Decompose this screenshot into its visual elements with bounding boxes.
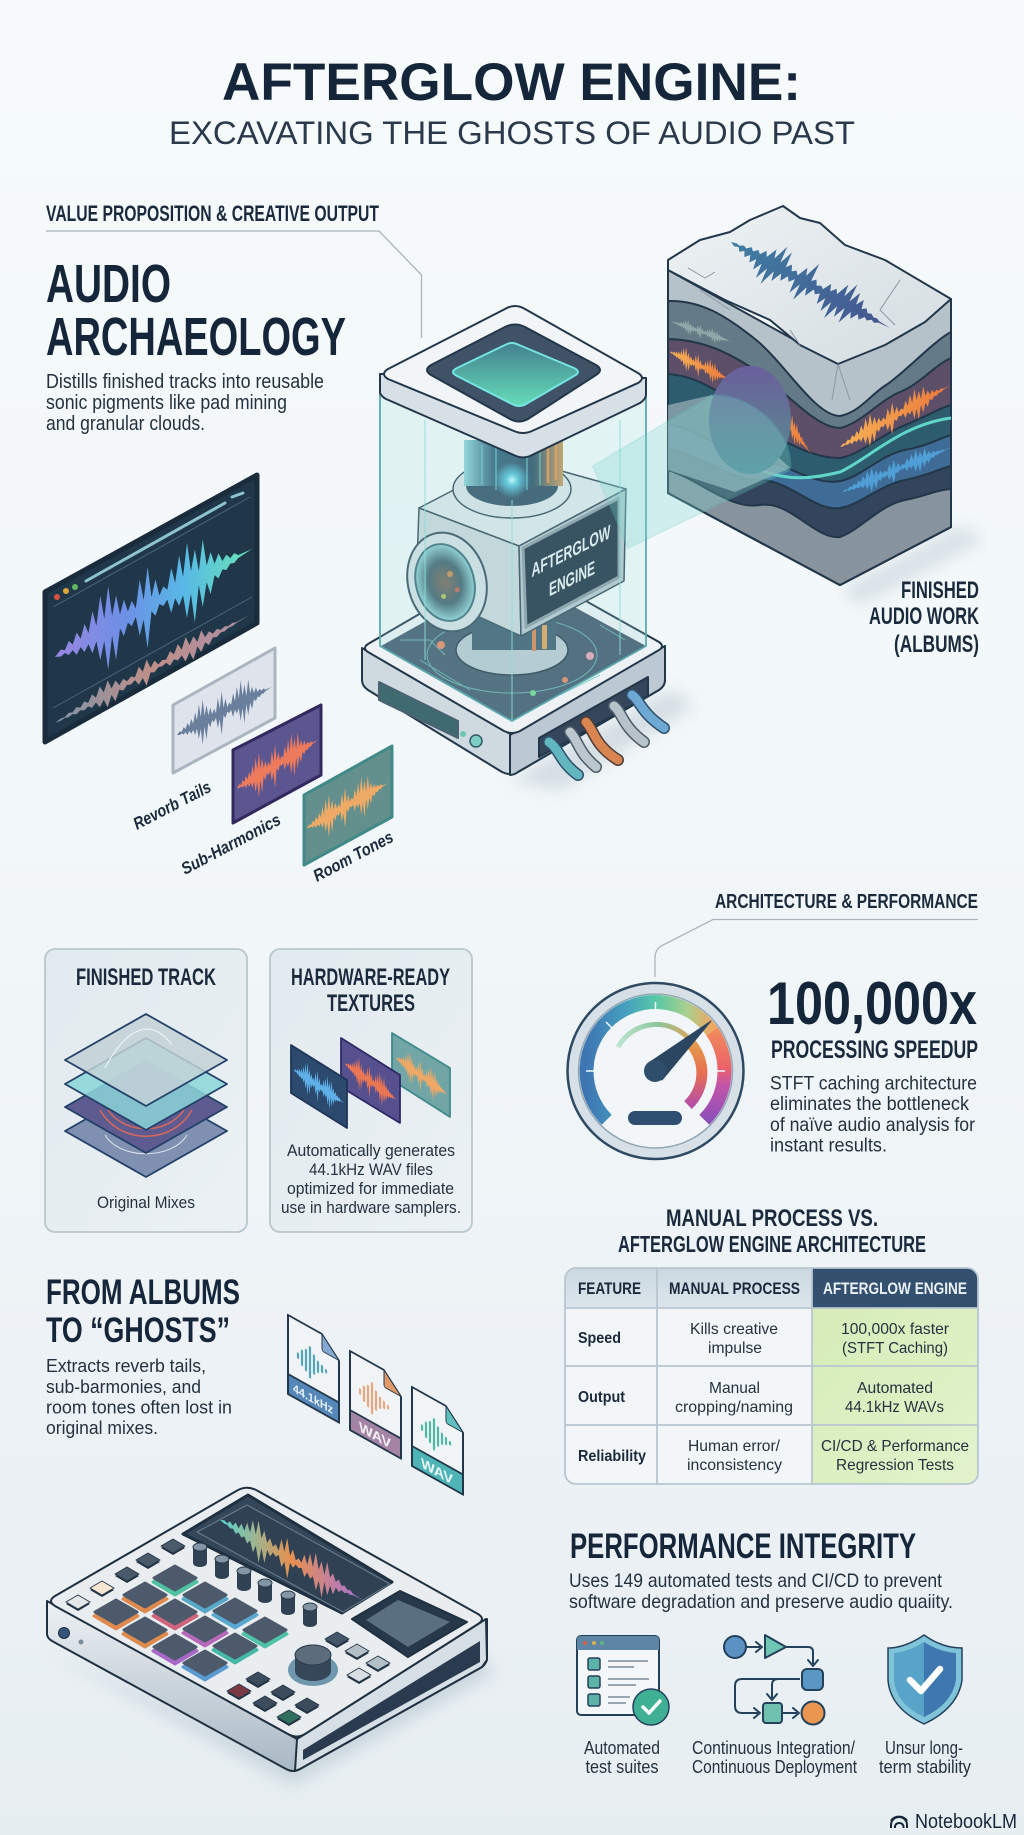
comparison table heading (618, 1205, 926, 1257)
description (569, 1570, 953, 1613)
panel caption: Original Mixes (97, 1193, 195, 1212)
stone cracks (688, 268, 900, 400)
label: sub-harmonics: Sub-Harmonics (178, 810, 284, 879)
circuit floor (381, 573, 646, 721)
label plate: AFTERGLOW (532, 522, 611, 582)
window buttons (54, 584, 78, 600)
icon: ci/cd pipeline flow (724, 1635, 824, 1724)
strata layers (668, 270, 951, 585)
rock top surface (668, 206, 951, 364)
waveforms in strata (670, 314, 952, 504)
status lights (460, 731, 482, 747)
table header row: FEATURE (578, 1280, 641, 1298)
label plate (523, 498, 619, 627)
etched waveform (718, 223, 904, 347)
panel description: Automatically generates (287, 1141, 455, 1160)
device body (47, 1488, 487, 1771)
title: AFTERGLOW ENGINE: (222, 53, 801, 112)
icon: wav file teal (412, 1387, 463, 1495)
panel description: 44.1kHz WAV files (309, 1160, 433, 1179)
subtitle: EXCAVATING THE GHOSTS OF AUDIO PAST (169, 115, 855, 151)
small knobs (193, 1543, 317, 1627)
main knob (288, 1645, 338, 1686)
section: from albums to ghosts (46, 1273, 240, 1438)
glass enclosure (380, 393, 646, 721)
window frame (45, 475, 257, 742)
section: value proposition (46, 201, 422, 435)
icon: automated test window (577, 1636, 669, 1725)
comparison table (565, 1268, 978, 1484)
texture card: reverb tails (173, 648, 275, 773)
icon: 44.1kHz file (288, 1315, 339, 1423)
description (46, 371, 324, 435)
icon caption: automated test suites: test suites (586, 1757, 658, 1777)
table row: reliability: inconsistency (687, 1457, 782, 1474)
layered mix stack (65, 1014, 227, 1177)
rock shadow (840, 525, 985, 605)
heading: audio archaeology: ARCHAEOLOGY (46, 307, 346, 367)
icon caption: long-term stability: term stability (879, 1757, 971, 1777)
panel heading: TEXTURES (327, 990, 415, 1017)
table header row: AFTERGLOW ENGINE (823, 1280, 967, 1298)
stat description (770, 1074, 977, 1156)
leader line (655, 920, 978, 977)
table row: reliability: Regression Tests (836, 1457, 954, 1474)
icon caption: automated test suites (584, 1738, 660, 1777)
upper column (464, 440, 563, 490)
cables (549, 695, 664, 775)
front jacks (58, 1628, 84, 1644)
description: software degradation and preserve audio quaiity. (569, 1591, 953, 1613)
heading: TO “GHOSTS” (46, 1311, 230, 1350)
screen waveform (220, 1499, 363, 1621)
window guides (53, 497, 252, 708)
heading (46, 1273, 240, 1350)
icon: wav file teal: WAV (421, 1455, 453, 1489)
section label: VALUE PROPOSITION & CREATIVE OUTPUT (46, 201, 379, 226)
title bar (86, 493, 243, 581)
icon: 44.1kHz file: 44.1kHz (293, 1381, 333, 1417)
heading: audio archaeology (46, 254, 346, 367)
indicator slot (379, 682, 458, 738)
label: finished audio work: (ALBUMS) (894, 631, 979, 658)
panel description: optimized for immediate (287, 1179, 454, 1198)
label: finished audio work: FINISHED (901, 577, 979, 604)
description: original mixes. (46, 1418, 158, 1438)
texture card: sub-harmonics (233, 705, 321, 823)
illustration: afterglow engine machine (362, 306, 790, 790)
table row: speed: Kills creative (690, 1321, 778, 1338)
table fills (565, 1268, 978, 1484)
lens (396, 524, 498, 640)
label: room tones: Room Tones (310, 827, 397, 886)
icon caption: automated test suites: Automated (584, 1738, 660, 1758)
panel: finished track (45, 949, 247, 1232)
drum pads (94, 1566, 287, 1680)
description: sub-barmonies, and (46, 1377, 201, 1397)
icon: stability shield (888, 1635, 962, 1724)
panel description: use in hardware samplers. (281, 1198, 461, 1217)
icon: speed gauge (568, 983, 744, 1159)
central block (416, 458, 626, 636)
table row: output: Manual (709, 1380, 760, 1397)
table header row (578, 1280, 967, 1298)
table header row: MANUAL PROCESS (669, 1280, 800, 1298)
table row: reliability: Human error/ (688, 1438, 781, 1455)
illustration: hardware sampler (47, 1488, 495, 1785)
port slot (539, 677, 648, 757)
panel heading: FINISHED TRACK (76, 964, 216, 991)
panel description (281, 1141, 461, 1217)
stat description: eliminates the bottleneck (770, 1094, 969, 1115)
section: architecture and performance (568, 891, 978, 1159)
description: sonic pigments like pad mining (46, 392, 287, 414)
icon caption: ci/cd: Continuous Deployment (692, 1757, 857, 1777)
table row: speed: (STFT Caching) (842, 1340, 948, 1357)
table row: output: Automated (857, 1380, 933, 1397)
function buttons (66, 1539, 390, 1726)
label: reverb tails: Revorb Tails (130, 777, 214, 834)
ring collar (453, 460, 571, 518)
section: performance integrity (569, 1527, 971, 1777)
device shadow (47, 1650, 495, 1785)
stat: 100,000x: 100,000x (767, 970, 977, 1037)
panel heading (291, 964, 450, 1017)
table row: speed: 100,000x faster (841, 1321, 950, 1338)
label: finished audio work (869, 577, 979, 658)
leader line (46, 231, 422, 338)
texture card: room tones (304, 746, 392, 865)
texture tiles (291, 1033, 450, 1128)
top cap (380, 306, 646, 458)
icon caption: ci/cd: Continuous Integration/ (692, 1738, 855, 1758)
description (46, 1356, 232, 1438)
table grid (565, 1268, 978, 1484)
main screen (183, 1495, 392, 1613)
table row: output: 44.1kHz WAVs (845, 1399, 944, 1416)
icon caption: long-term stability (879, 1738, 971, 1777)
illustration: rock strata of finished audio (668, 206, 985, 605)
base plinth (362, 562, 665, 775)
stat description: of naïve audio analysis for (770, 1115, 976, 1136)
stat description: instant results. (770, 1136, 887, 1156)
description: room tones often lost in (46, 1398, 232, 1418)
table row: output (578, 1380, 944, 1416)
icon: wav file orange (350, 1351, 401, 1459)
illustration: waveform window (45, 475, 257, 742)
heading: audio archaeology: AUDIO (46, 254, 171, 314)
secondary screen (352, 1591, 467, 1657)
tinted stone under beam (668, 395, 790, 492)
panel heading: HARDWARE-READY (291, 964, 450, 991)
secondary waveform (55, 602, 250, 736)
description: Uses 149 automated tests and CI/CD to prevent (569, 1570, 943, 1592)
main waveform (55, 507, 252, 699)
icon caption: long-term stability: Unsur long- (885, 1738, 963, 1758)
stat description: STFT caching architecture (770, 1074, 977, 1094)
table row: speed: Speed (578, 1330, 621, 1347)
base shadow (510, 690, 695, 790)
icon: wav file orange: WAV (359, 1419, 391, 1453)
description: Distills finished tracks into reusable (46, 371, 324, 393)
table row: output: cropping/naming (675, 1399, 793, 1416)
circuit traces (400, 617, 625, 695)
table row: reliability: Reliability (578, 1448, 646, 1465)
table row: speed: impulse (708, 1340, 762, 1357)
heading: FROM ALBUMS (46, 1273, 240, 1312)
lower column (456, 612, 568, 675)
label plate: ENGINE (549, 557, 595, 601)
icon caption: ci/cd (692, 1738, 857, 1777)
table row: output: Output (578, 1389, 626, 1406)
column glow (494, 462, 530, 498)
description: and granular clouds. (46, 413, 205, 435)
panel: hardware-ready textures (270, 949, 472, 1232)
cavern (709, 366, 791, 474)
light beam to rock (593, 395, 790, 548)
circuit lights (437, 641, 594, 696)
table row: speed (578, 1321, 950, 1357)
table row: reliability (578, 1438, 969, 1474)
side slot (303, 1641, 480, 1760)
description: Extracts reverb tails, (46, 1356, 206, 1376)
table row: reliability: CI/CD & Performance (821, 1438, 969, 1455)
comparison table heading: MANUAL PROCESS VS. (666, 1205, 878, 1232)
